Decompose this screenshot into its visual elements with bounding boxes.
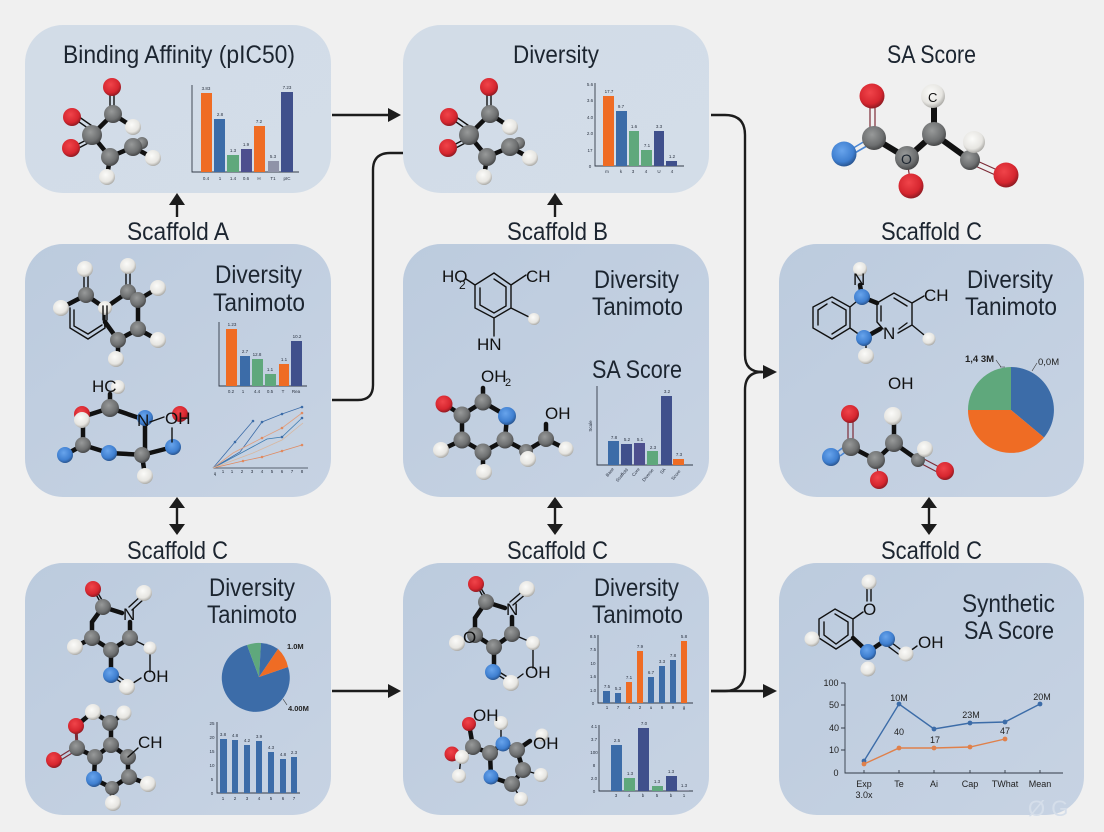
panel: scaffold C right (779, 244, 1084, 497)
bar chart: lower left: 7 (293, 796, 296, 801)
bar chart: diversity: 3.6 (587, 98, 594, 103)
heading: SA score: SA Score (887, 41, 976, 69)
line chart: scaffold A: 6 (281, 469, 284, 474)
molecule: lower right: O (863, 600, 876, 619)
line chart: lower right: TWhat (992, 779, 1019, 789)
bar chart: SA score: Scale (588, 420, 593, 432)
molecule: lower middle lower: OH (533, 734, 558, 753)
bar chart: scaffold A (219, 322, 307, 394)
molecule: scaffold C upper: N (853, 270, 865, 289)
bar chart: lower middle lower: 100 (590, 750, 598, 755)
molecule: lower middle lower: OH (473, 706, 498, 725)
molecule: scaffold B lower: OH (481, 367, 506, 386)
watermark: Ø G (1028, 796, 1068, 821)
bar chart: binding affinity: 2.8 (217, 112, 224, 117)
bar chart: lower middle lower: b (670, 793, 673, 798)
bar chart: SA score: 5.1 (637, 437, 644, 442)
molecule: binding affinity (62, 78, 161, 185)
bar chart: scaffold A: T (282, 389, 285, 394)
arrow: double right (921, 497, 937, 535)
heading: diversity tanimoto: Tanimoto (207, 601, 297, 629)
panel: SA score top (no card) (832, 41, 1018, 198)
arrow: double middle (547, 497, 563, 535)
molecule: lower left upper: OH (143, 667, 168, 686)
line chart: lower right: 17 (930, 735, 940, 745)
bar chart: scaffold A: 4.4 (254, 389, 261, 394)
molecule: lower left lower: CH (138, 733, 163, 752)
label: scaffold C lower middle: Scaffold C (507, 537, 608, 565)
line chart: lower right: Ai (930, 779, 938, 789)
line chart: lower right: 40 (829, 723, 839, 733)
molecule: lower left upper (67, 581, 168, 695)
bar chart: binding affinity: 7.2 (256, 119, 263, 124)
bar chart: binding affinity: H (257, 176, 261, 181)
bar chart: binding affinity: T1 (270, 176, 276, 181)
bar chart: SA score: SA (659, 467, 667, 475)
arrow: scaffold A to diversity (332, 153, 403, 400)
bar chart: binding affinity: 0.6 (243, 176, 250, 181)
heading: diversity tanimoto: Diversity (215, 261, 302, 289)
bar chart: scaffold A: 12.8 (253, 352, 262, 357)
line chart: scaffold A: 2 (241, 469, 244, 474)
line chart: scaffold A: q (214, 471, 217, 476)
label: scaffold A: Scaffold A (127, 218, 229, 246)
bar chart: SA score: 5.2 (624, 437, 631, 442)
molecule: scaffold B upper: 2 (459, 278, 466, 292)
bar chart: lower left: 5 (211, 777, 214, 782)
bar chart: lower left: 10 (209, 763, 215, 768)
bar chart: lower middle upper: 5.8 (681, 634, 688, 639)
bar chart: diversity: U (657, 169, 661, 174)
heading: diversity: Diversity (513, 41, 599, 69)
bar chart: lower left: 20 (209, 735, 215, 740)
heading: diversity tanimoto: Tanimoto (213, 289, 305, 317)
molecule: scaffold C upper: CH (924, 286, 949, 305)
bar chart: diversity: m (605, 169, 609, 174)
bar chart: lower left: 5 (270, 796, 273, 801)
molecule: lower middle upper: OH (525, 663, 550, 682)
heading: diversity tanimoto: Tanimoto (592, 293, 683, 321)
label: scaffold C lower left: Scaffold C (127, 537, 228, 565)
molecule: scaffold B lower (433, 367, 574, 480)
arrow: scaffold A up (169, 193, 185, 217)
arrow: lower middle to lower right (711, 684, 777, 698)
bar chart: binding affinity: pIC (283, 176, 291, 181)
bar chart: scaffold A: 2.7 (242, 349, 249, 354)
molecule: scaffold A lower: N (137, 411, 149, 430)
bar chart: lower middle lower: b (642, 793, 645, 798)
molecule: lower middle upper: N (506, 600, 518, 619)
panel: scaffold B (403, 244, 709, 497)
bar chart: scaffold A: 1.23 (228, 322, 237, 327)
bar chart: lower middle upper: 1.6 (590, 674, 597, 679)
bar chart: lower middle lower: 1.3 (627, 771, 634, 776)
line chart: scaffold A: 1 (222, 469, 225, 474)
bar chart: lower middle upper: u (650, 705, 653, 710)
molecule: SA score: C (928, 90, 937, 105)
line chart: lower right: Exp (856, 779, 872, 789)
bar chart: lower middle lower: 1.3 (668, 769, 675, 774)
bar chart: SA score: 7.3 (676, 452, 683, 457)
bar chart: scaffold A: 1.1 (267, 367, 274, 372)
molecule: SA score: O (901, 151, 912, 167)
bar chart: lower middle lower: 2.5 (614, 738, 621, 743)
line chart: lower right: 10M (890, 693, 908, 703)
line chart: scaffold A: 4 (261, 469, 264, 474)
bar chart: lower left: 15 (209, 749, 215, 754)
bar chart: SA score: Core (631, 466, 641, 477)
heading: diversity tanimoto (965, 266, 1057, 321)
molecule: diversity (439, 78, 538, 185)
bar chart: lower middle upper: 10 (590, 661, 596, 666)
bar chart: lower left: 1 (222, 796, 225, 801)
bar chart: binding affinity: 1 (219, 176, 222, 181)
bar chart: lower left: 4 (258, 796, 261, 801)
line chart: lower right: 0 (833, 768, 839, 778)
bar chart: lower left: 6 (282, 796, 285, 801)
heading: synthetic SA score: Synthetic (962, 590, 1055, 618)
line chart: lower right: Cap (962, 779, 978, 789)
line chart: lower right: 40 (894, 727, 904, 737)
bar chart: lower middle upper: 7.9 (637, 644, 644, 649)
arrow: scaffold B up (547, 193, 563, 217)
bar chart: lower middle lower: 4.1 (591, 724, 598, 729)
pie chart: lower left (222, 642, 309, 713)
bar chart: binding affinity (192, 85, 299, 181)
panel: scaffold C lower middle (403, 563, 709, 815)
panel: scaffold C lower right (779, 563, 1084, 821)
bar chart: binding affinity: 7.23 (283, 85, 292, 90)
bar chart: lower middle upper: 2 (639, 705, 642, 710)
label: scaffold B: Scaffold B (507, 218, 608, 246)
heading: diversity tanimoto: Diversity (209, 574, 295, 602)
bar chart: lower middle lower: 8 (593, 763, 596, 768)
bar chart: diversity: 7.1 (644, 143, 651, 148)
bar chart: SA score: Scaffold (615, 467, 629, 483)
bar chart: binding affinity: 3.83 (202, 86, 211, 91)
bar chart: lower middle lower: 1 (683, 793, 686, 798)
bar chart: lower left: 3 (246, 796, 249, 801)
heading: diversity tanimoto (592, 266, 683, 321)
bar chart: diversity: 1.6 (631, 124, 638, 129)
bar chart: lower middle upper: 1.0 (590, 688, 597, 693)
bar chart: SA score: Diverse (641, 467, 655, 482)
bar chart: binding affinity: 0.4 (203, 176, 210, 181)
molecule: scaffold A upper (53, 258, 166, 367)
heading: diversity tanimoto: Diversity (967, 266, 1053, 294)
arrow: lower middle up to scaffold C (711, 372, 762, 691)
pie chart: scaffold C: 0,0M (1038, 357, 1059, 368)
panel: scaffold C lower left (25, 563, 331, 815)
line chart: lower right: Mean (1029, 779, 1051, 789)
bar chart: binding affinity: 1.3 (230, 148, 237, 153)
line chart: scaffold A: 3 (251, 469, 254, 474)
bar chart: lower middle lower: 1.3 (654, 779, 661, 784)
molecule: lower left lower (46, 704, 163, 811)
bar chart: lower middle upper: 9 (672, 705, 675, 710)
molecule: lower right: OH (918, 633, 944, 652)
molecule: SA score (832, 84, 1018, 198)
bar chart: lower left: 4.8 (232, 733, 239, 738)
bar chart: SA score: 7.8 (611, 435, 618, 440)
heading: diversity tanimoto: Diversity (594, 266, 679, 294)
bar chart: diversity: 5.6 (587, 82, 594, 87)
bar chart: SA score: Score (670, 469, 682, 481)
molecule: scaffold A lower: HC (92, 377, 117, 396)
pie chart: lower left: 1.0M (287, 642, 304, 651)
bar chart: lower middle upper: 7 (617, 705, 620, 710)
bar chart: lower left: 25 (209, 721, 215, 726)
heading: synthetic SA score (962, 590, 1055, 645)
label: scaffold C right: Scaffold C (881, 218, 982, 246)
bar chart: lower left (209, 721, 300, 801)
bar chart: binding affinity: 1.9 (243, 142, 250, 147)
molecule: lower middle upper: O (463, 628, 476, 647)
bar chart: lower middle lower: 3.7 (591, 737, 598, 742)
line chart: scaffold A (213, 406, 308, 476)
pie chart: scaffold C: 1,4 3M (965, 354, 994, 365)
bar chart: lower left: 4.8 (280, 752, 287, 757)
bar chart: lower middle upper: 3.3 (659, 659, 666, 664)
bar chart: lower middle lower: 4 (628, 793, 631, 798)
bar chart: SA score: Base (605, 466, 615, 478)
bar chart: diversity: 3 (632, 169, 635, 174)
bar chart: lower middle upper: 6 (661, 705, 664, 710)
molecule: lower middle upper (449, 576, 550, 691)
bar chart: SA score: 3.2 (664, 389, 671, 394)
line chart: lower right: 10 (829, 745, 839, 755)
line chart: lower right: 20M (1033, 692, 1051, 702)
molecule: scaffold A lower (57, 377, 190, 484)
bar chart: binding affinity: 5.3 (270, 154, 277, 159)
bar chart: lower middle upper: 7.1 (626, 675, 633, 680)
arrow: lower left to lower middle (332, 684, 401, 698)
bar chart: scaffold A: 1 (242, 389, 245, 394)
bar chart: diversity: 3.3 (656, 124, 663, 129)
heading: SA score: SA Score (592, 356, 682, 384)
heading: diversity tanimoto (213, 261, 305, 317)
molecule: scaffold C lower (822, 405, 954, 489)
bar chart: diversity: 9.7 (618, 104, 625, 109)
bar chart: lower middle lower: 7.0 (641, 721, 648, 726)
molecule: lower left upper: N (123, 605, 135, 624)
line chart: scaffold A: 7 (291, 469, 294, 474)
text: OH: OH (888, 374, 914, 393)
bar chart: scaffold A: 0.5 (267, 389, 274, 394)
bar chart: scaffold A: 0.2 (228, 389, 235, 394)
bar chart: diversity: 1.2 (669, 154, 676, 159)
molecule: scaffold C upper (813, 262, 949, 364)
heading: diversity tanimoto (592, 574, 683, 629)
heading: diversity tanimoto: Tanimoto (592, 601, 683, 629)
line chart: lower right: Te (894, 779, 904, 789)
bar chart: diversity (587, 82, 684, 174)
label: scaffold C lower right: Scaffold C (881, 537, 982, 565)
arrow: diversity to scaffold C (711, 115, 777, 379)
bar chart: diversity: 4 (671, 169, 674, 174)
panel: scaffold A (25, 244, 331, 497)
bar chart: lower middle upper: 7.5 (590, 647, 597, 652)
molecule: scaffold A lower: OH (165, 409, 190, 428)
bar chart: lower left: 3.8 (220, 732, 227, 737)
bar chart: lower middle upper (590, 634, 693, 710)
bar chart: diversity: 2.0 (587, 131, 594, 136)
bar chart: lower left: 0 (211, 791, 214, 796)
bar chart: diversity: 17.7 (605, 89, 614, 94)
bar chart: lower middle upper: 1 (606, 705, 609, 710)
bar chart: diversity: k (620, 169, 623, 174)
bar chart: lower left: 4.2 (244, 738, 251, 743)
line chart: lower right (823, 678, 1063, 800)
bar chart: lower middle lower: 0 (593, 789, 596, 794)
molecule: scaffold B upper: HO (442, 267, 468, 286)
line chart: lower right: 100 (823, 678, 839, 688)
heading: binding affinity: Binding Affinity (pIC50) (63, 41, 295, 69)
bar chart: lower middle lower (590, 721, 693, 798)
pie chart: lower left: 4.00M (288, 704, 309, 713)
line chart: lower right: 3.0x (855, 790, 873, 800)
bar chart: diversity: 4.0 (587, 115, 594, 120)
panel: diversity top (403, 25, 709, 193)
bar chart: lower middle lower: 3 (615, 793, 618, 798)
line chart: lower right: 23M (962, 710, 980, 720)
bar chart: lower middle lower: 2.0 (591, 776, 598, 781)
panel: binding affinity (25, 25, 331, 193)
bar chart: lower middle upper: 6.7 (648, 670, 655, 675)
molecule: lower middle lower (444, 706, 558, 806)
bar chart: scaffold A: Rea (292, 389, 301, 394)
bar chart: diversity: 0 (589, 164, 592, 169)
bar chart: lower middle lower: 1.3 (681, 783, 688, 788)
heading: synthetic SA score: SA Score (964, 617, 1054, 645)
molecule: scaffold B upper: CH (526, 267, 551, 286)
bar chart: lower middle lower: 5 (656, 793, 659, 798)
bar chart: lower left: 2.3 (291, 750, 298, 755)
molecule: scaffold B upper (442, 267, 551, 354)
heading: diversity tanimoto: Tanimoto (965, 293, 1057, 321)
bar chart: lower middle upper: 5.3 (615, 686, 622, 691)
molecule: lower right (804, 574, 944, 676)
bar chart: scaffold A: 1.1 (281, 357, 288, 362)
pie chart: scaffold C (965, 354, 1059, 453)
line chart: scaffold A: 1 (231, 469, 234, 474)
molecule: scaffold B upper: HN (477, 335, 502, 354)
line chart: scaffold A: 8 (301, 469, 304, 474)
bar chart: lower left: 2 (234, 796, 237, 801)
bar chart: SA score (588, 386, 693, 483)
line chart: lower right: 50 (829, 700, 839, 710)
bar chart: lower middle upper: 7.8 (670, 653, 677, 658)
bar chart: scaffold A: 10.2 (293, 334, 302, 339)
molecule: scaffold B lower: OH (545, 404, 570, 423)
heading: diversity tanimoto (207, 574, 297, 629)
line chart: scaffold A: 5 (271, 469, 274, 474)
bar chart: lower left: 3.9 (256, 734, 263, 739)
bar chart: lower left: 4.3 (268, 745, 275, 750)
bar chart: lower middle upper: 8.5 (590, 634, 597, 639)
bar chart: diversity: 17 (587, 148, 593, 153)
bar chart: SA score: 2.3 (650, 445, 657, 450)
heading: diversity tanimoto: Diversity (594, 574, 679, 602)
molecule: scaffold C upper: N (883, 324, 895, 343)
bar chart: binding affinity: 1.4 (230, 176, 237, 181)
bar chart: lower middle upper: g (683, 705, 686, 710)
bar chart: lower middle upper: 0 (592, 701, 595, 706)
molecule: scaffold B lower: 2 (505, 377, 511, 389)
line chart: lower right: 47 (1000, 726, 1010, 736)
bar chart: lower middle upper: 4 (628, 705, 631, 710)
bar chart: diversity: 4 (645, 169, 648, 174)
arrow: binding affinity to diversity (332, 108, 401, 122)
arrow: double left (169, 497, 185, 535)
bar chart: lower middle upper: 7.5 (604, 684, 611, 689)
